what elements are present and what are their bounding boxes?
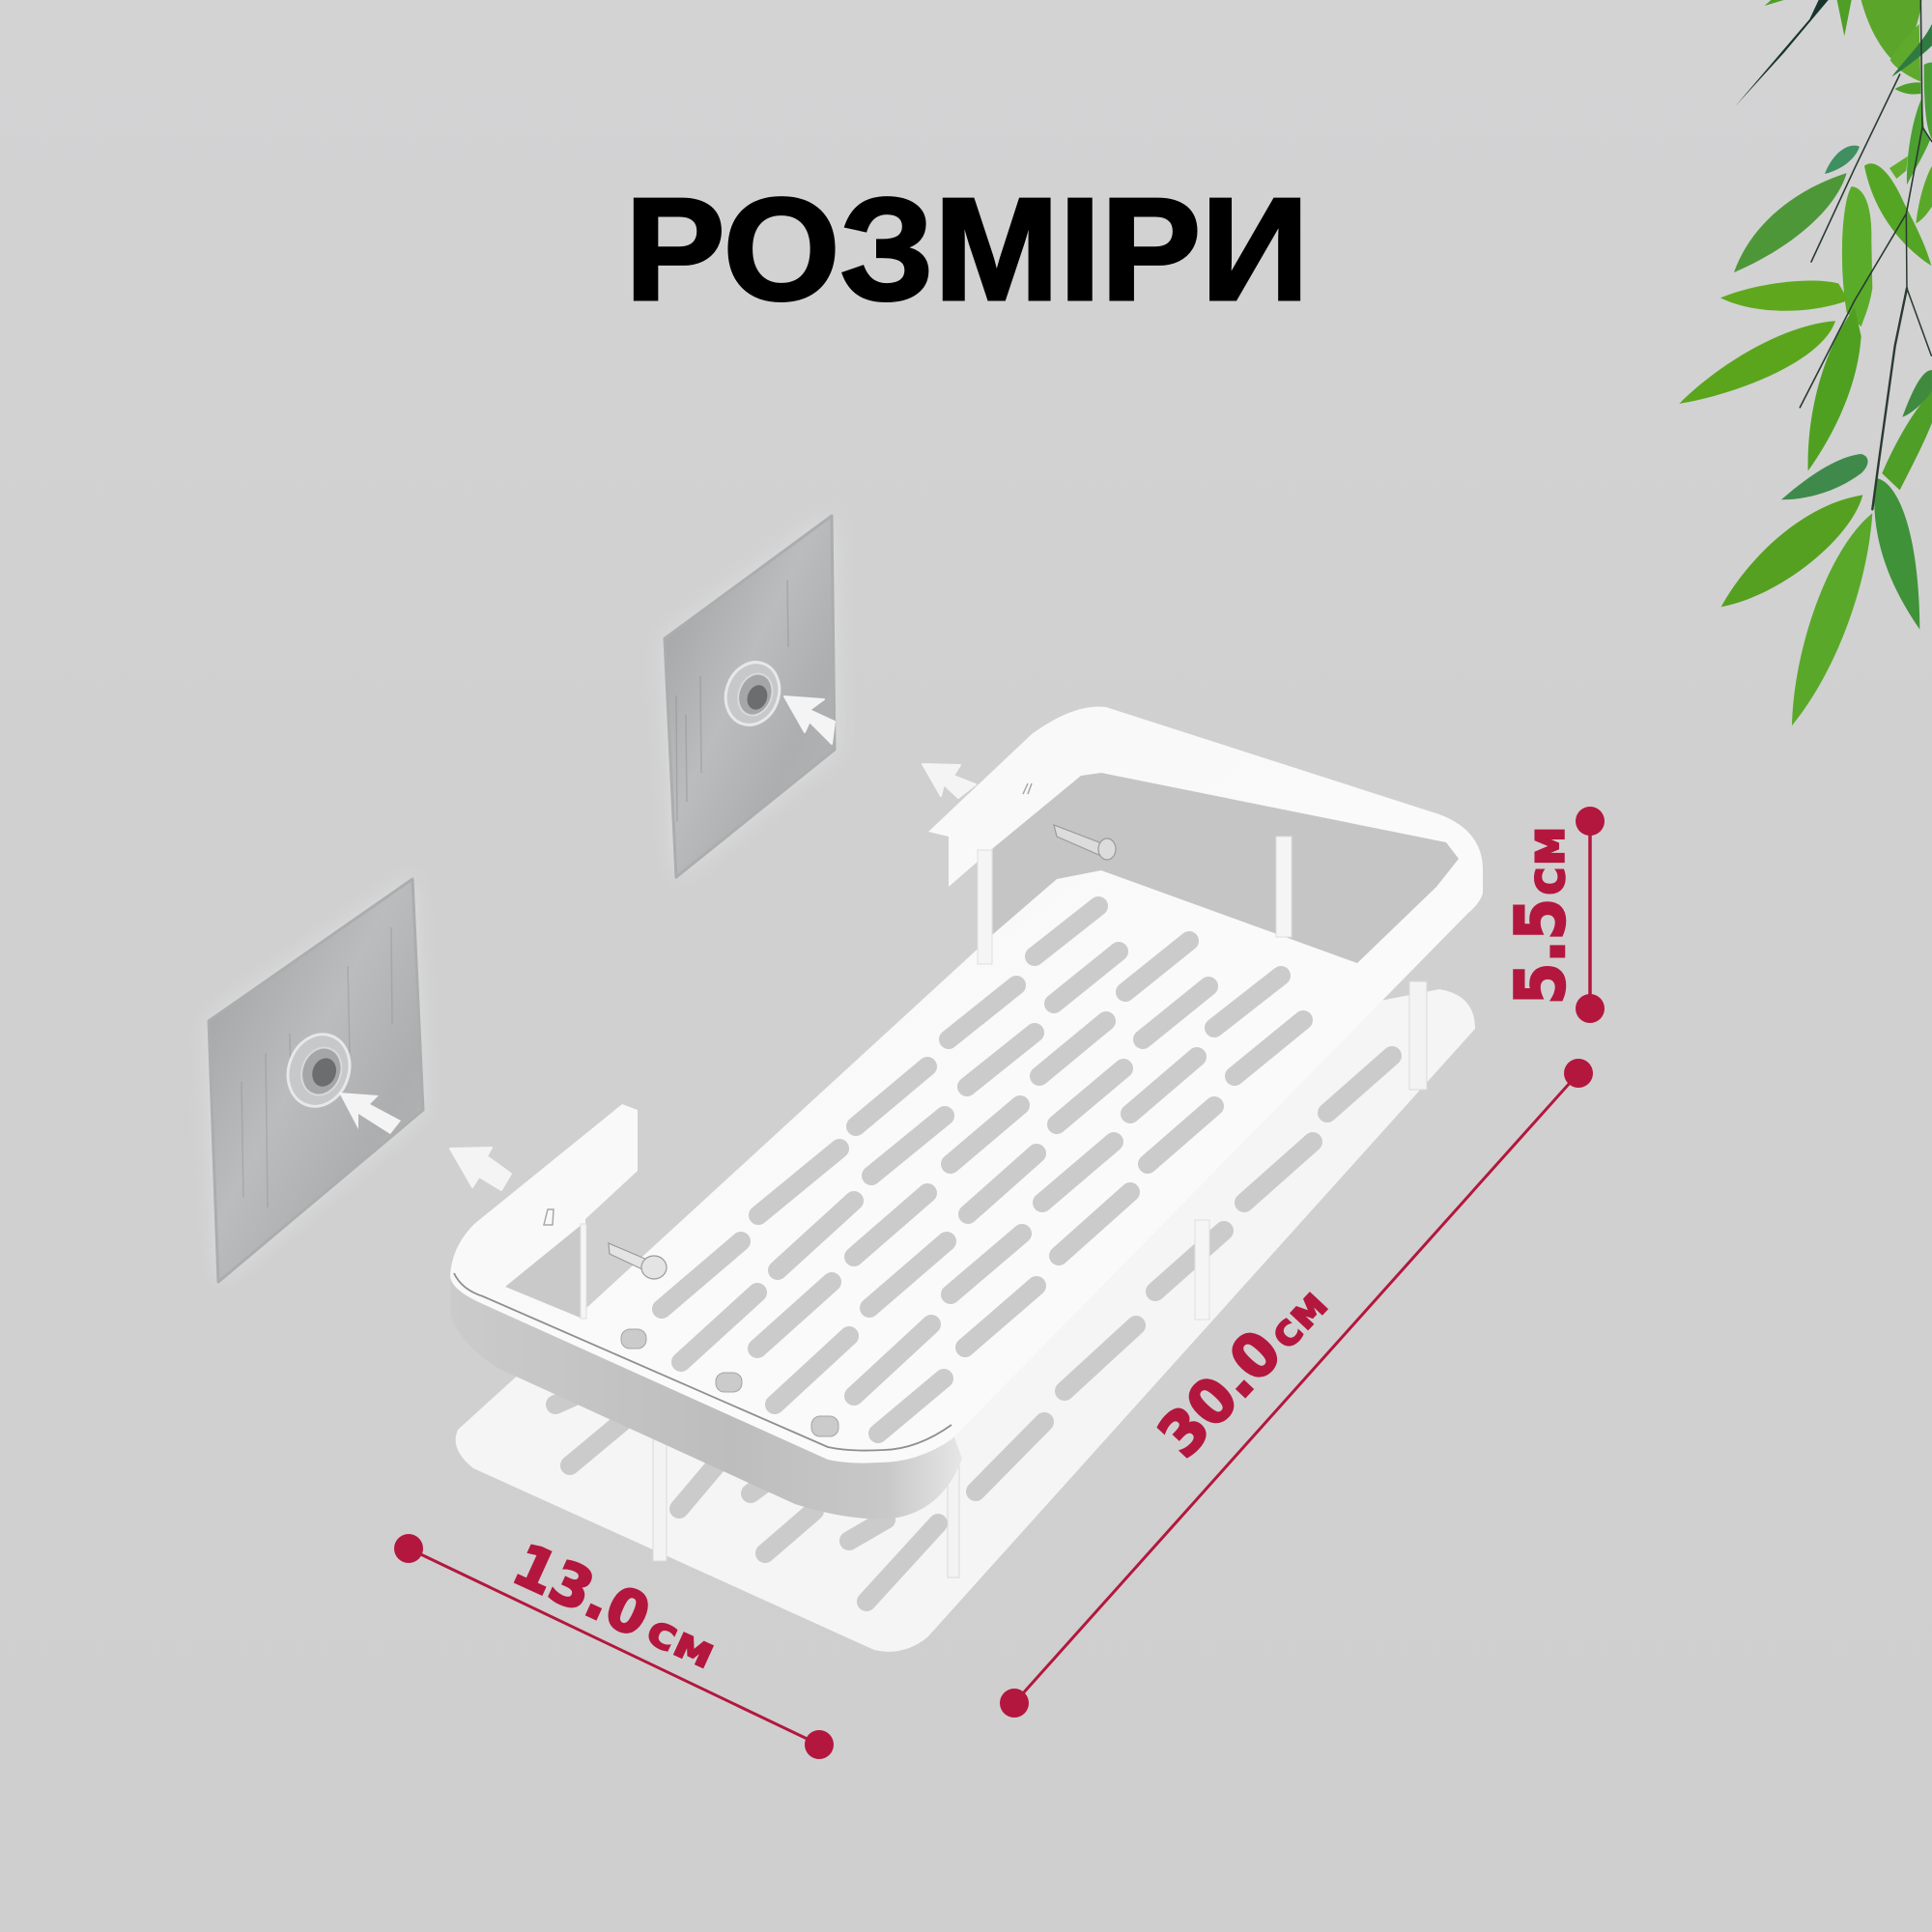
front posts over rim [581, 837, 1292, 1320]
rim edge line [454, 1273, 952, 1451]
bamboo branch decoration [1679, 0, 1932, 725]
dimension: height 5.5 cm [1501, 807, 1605, 1023]
halo behind plaques [209, 516, 835, 1282]
arrow into knob [339, 1093, 401, 1134]
suction knob [278, 1026, 359, 1115]
support posts [653, 981, 1427, 1577]
tray side band [450, 1275, 962, 1519]
arrow right bracket [923, 764, 976, 798]
rear screw [1054, 825, 1116, 860]
dimension: length 30.0 cm [1000, 1059, 1593, 1718]
dimension: length 30.0 cm: см [1258, 1278, 1338, 1359]
suction knob [717, 655, 788, 732]
dimension: height 5.5 cm: 5.5 [1501, 898, 1580, 1005]
arrow left bracket [450, 1148, 511, 1190]
bamboo leaves [1679, 0, 1932, 725]
dimension: width 13.0 cm: см [639, 1603, 724, 1679]
left adhesive plaque [209, 879, 423, 1282]
title: РОЗМІРИ [625, 167, 1309, 330]
right adhesive plaque [665, 516, 835, 877]
floor slots [662, 906, 1303, 1434]
tray top surface [450, 707, 1483, 1463]
rear opening [993, 773, 1459, 963]
bamboo stems [1800, 0, 1932, 509]
dimension: width 13.0 cm: 13.0 [503, 1531, 660, 1651]
lower drain plate [456, 989, 1475, 1652]
front screw [609, 1243, 667, 1279]
dimension: height 5.5 cm: см [1516, 826, 1577, 895]
front opening [505, 1224, 582, 1319]
bracket hole marks [544, 783, 1032, 1225]
dimension: width 13.0 cm [394, 1531, 834, 1759]
white shelf [450, 707, 1483, 1652]
arrow into knob [784, 696, 835, 744]
dimension: length 30.0 cm: 30.0 [1145, 1317, 1295, 1470]
small drain holes [621, 1329, 838, 1436]
